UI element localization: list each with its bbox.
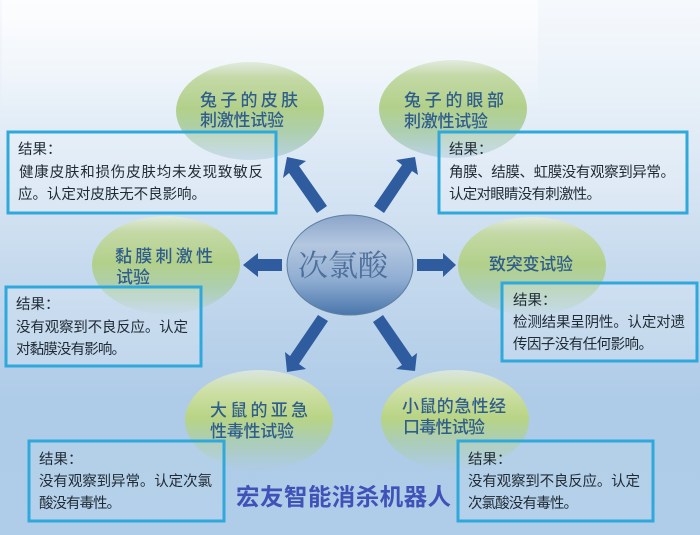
- hub ellipse: [287, 215, 413, 315]
- arrow: down-right: [373, 315, 417, 371]
- result text: mutagenicity: 检测结果呈阴性。认定对遗: [513, 314, 686, 331]
- heading: rabbit skin: 刺激性试验: [200, 110, 284, 130]
- result text: rabbit eye: 结果：: [449, 141, 492, 158]
- result text: mucosa: 没有观察到不良反应。认定: [16, 318, 188, 336]
- hub label: 次氯酸: [298, 250, 389, 283]
- brand title: 宏友智能消杀机器人: [236, 484, 451, 510]
- result text: rat subacute: 结果：: [39, 451, 82, 468]
- heading: rabbit eye: 刺激性试验: [404, 111, 488, 131]
- top-left light panel: [2, 0, 538, 110]
- result text: rat subacute: 酸没有毒性。: [39, 495, 121, 512]
- result text: rabbit skin: 结果：: [18, 141, 62, 158]
- bubble: mutagenicity: [458, 217, 606, 315]
- heading: mouse acute: 口毒性试验: [403, 417, 485, 437]
- result text: mutagenicity: 结果：: [513, 292, 556, 309]
- result text: rabbit eye: 认定对眼睛没有刺激性。: [449, 186, 601, 203]
- arrow: right: [417, 253, 456, 277]
- heading: rabbit skin: 兔子的皮肤: [200, 91, 298, 110]
- arrow: left: [243, 253, 282, 277]
- result text: rabbit eye: 角膜、结膜、虹膜没有观察到异常。: [449, 163, 675, 181]
- panel: rat subacute toxicity test: [29, 370, 333, 521]
- bubble: rabbit skin: [176, 62, 324, 160]
- result text: rabbit skin: 应。认定对皮肤无不良影响。: [18, 185, 206, 203]
- result text: mouse acute: 结果：: [468, 451, 512, 468]
- bubble: rabbit eye: [379, 60, 527, 158]
- result text: mucosa: 对黏膜没有影响。: [16, 341, 126, 358]
- bubble: mucosa: [92, 216, 240, 314]
- result text: rat subacute: 没有观察到异常。认定次氯: [39, 472, 212, 490]
- arrow: up-right: [374, 157, 418, 213]
- heading: mucosa: 试验: [116, 267, 150, 287]
- heading: mucosa: 黏膜刺激性: [115, 247, 213, 266]
- heading: mutagenicity: 致突变试验: [489, 254, 573, 274]
- panel: mucosa test: [6, 216, 240, 366]
- result box: mouse acute: [458, 441, 653, 521]
- arrow: down-left: [285, 315, 328, 372]
- result text: rabbit skin: 健康皮肤和损伤皮肤均未发现致敏反: [19, 164, 263, 181]
- panel: rabbit skin test: [8, 62, 324, 213]
- arrow: up-left: [283, 157, 327, 213]
- result box: mucosa: [6, 287, 201, 366]
- heading: mouse acute: 小鼠的急性经: [402, 397, 506, 416]
- bubble: mouse acute: [381, 370, 529, 470]
- heading: rat subacute: 性毒性试验: [210, 421, 294, 441]
- bubble: rat subacute: [185, 370, 333, 470]
- result text: mouse acute: 没有观察到不良反应。认定: [468, 472, 640, 490]
- result box: rat subacute: [29, 441, 224, 521]
- result box: rabbit eye: [439, 132, 687, 213]
- result box: mutagenicity: [502, 283, 697, 361]
- result text: mucosa: 结果：: [16, 296, 60, 313]
- panel: rabbit eye test: [379, 60, 687, 213]
- heading: rabbit eye: 兔子的眼部: [404, 91, 504, 110]
- panel: mutagenicity test: [458, 217, 697, 361]
- heading: rat subacute: 大鼠的亚急: [210, 401, 308, 420]
- result text: mouse acute: 次氯酸没有毒性。: [468, 495, 578, 512]
- panel: mouse acute oral toxicity test: [381, 370, 653, 521]
- result box: rabbit skin: [8, 132, 276, 213]
- result text: mutagenicity: 传因子没有任何影响。: [513, 336, 653, 353]
- central hub: hypochlorous acid: [287, 215, 413, 315]
